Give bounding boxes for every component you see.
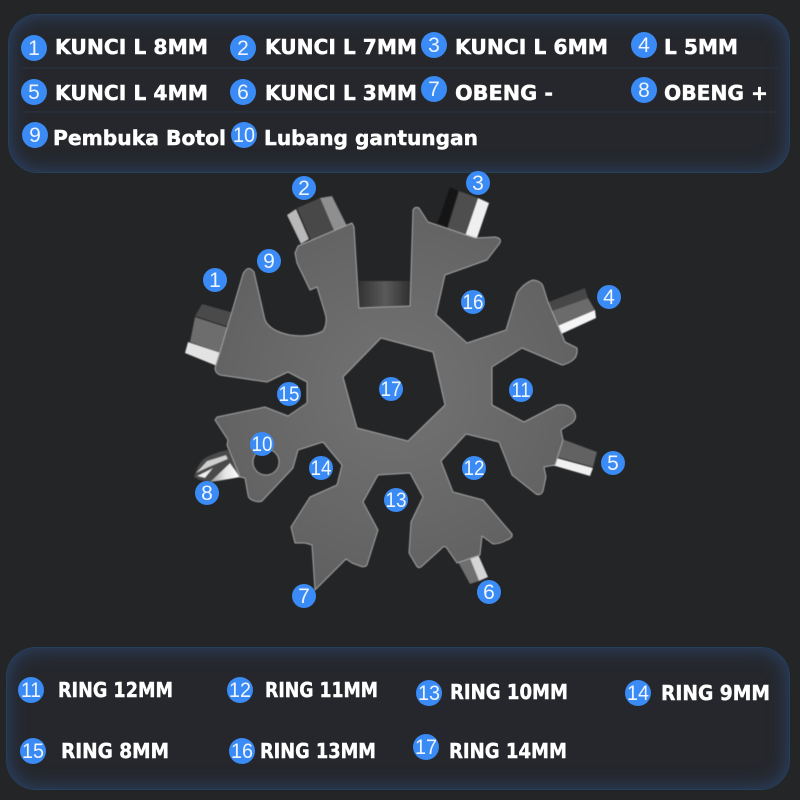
legend item 12: RING 11MM bbox=[265, 678, 378, 702]
legend item 16: RING 13MM bbox=[260, 739, 376, 763]
legend item 2: KUNCI L 7MM bbox=[265, 35, 417, 59]
callout 9 bbox=[257, 249, 281, 273]
callout 8: 8 bbox=[201, 482, 213, 505]
callout 4 bbox=[597, 285, 621, 309]
bridge cylinder bbox=[359, 281, 412, 309]
callout 9: 9 bbox=[263, 250, 275, 273]
callout 15: 15 bbox=[278, 383, 300, 406]
hex bit 1 bbox=[185, 304, 234, 366]
legend item 16 bbox=[229, 738, 376, 764]
callout 7 bbox=[292, 584, 316, 608]
legend item 4: 4 bbox=[638, 34, 650, 57]
callout 6 bbox=[477, 580, 501, 604]
tool body bbox=[215, 207, 577, 590]
legend item 14 bbox=[625, 680, 770, 706]
legend item 14: RING 9MM bbox=[661, 681, 770, 705]
hex bit 4 bbox=[546, 288, 596, 335]
legend item 15 bbox=[20, 738, 169, 764]
hex bit 3 bbox=[437, 187, 489, 241]
callout 11: 11 bbox=[512, 379, 530, 402]
callout 6: 6 bbox=[483, 581, 495, 604]
legend item 7: OBENG - bbox=[455, 81, 553, 105]
legend item 12 bbox=[227, 677, 378, 703]
callout 5: 5 bbox=[607, 452, 619, 475]
legend item 8 bbox=[631, 77, 768, 105]
legend item 4 bbox=[631, 32, 738, 59]
legend item 13: 13 bbox=[418, 682, 440, 705]
legend item 6: KUNCI L 3MM bbox=[265, 81, 417, 105]
callout 17: 17 bbox=[380, 378, 402, 401]
callout 16: 16 bbox=[462, 291, 484, 314]
legend item 11: 11 bbox=[21, 679, 41, 702]
legend item 12: 12 bbox=[229, 679, 251, 702]
legend item 10: 10 bbox=[233, 124, 255, 147]
legend item 14: 14 bbox=[627, 682, 649, 705]
legend item 3: KUNCI L 6MM bbox=[455, 35, 608, 59]
hex bit 2 bbox=[287, 196, 347, 244]
legend item 9: Pembuka Botol bbox=[53, 126, 226, 150]
callout 3 bbox=[466, 171, 490, 195]
hex bit 6 bbox=[458, 552, 488, 584]
legend item 16: 16 bbox=[231, 740, 253, 763]
legend item 15: RING 8MM bbox=[61, 739, 169, 763]
legend item 13: RING 10MM bbox=[450, 680, 568, 704]
callout 8 bbox=[195, 481, 219, 505]
legend item 9: 9 bbox=[29, 124, 41, 147]
callout 1: 1 bbox=[209, 269, 221, 292]
legend item 8: OBENG + bbox=[664, 81, 768, 105]
callout 2 bbox=[292, 176, 316, 200]
legend item 6: 6 bbox=[237, 81, 249, 104]
legend item 5: KUNCI L 4MM bbox=[55, 81, 208, 105]
legend item 8: 8 bbox=[638, 79, 650, 102]
callout 10: 10 bbox=[252, 433, 272, 456]
legend item 3: 3 bbox=[428, 34, 440, 57]
callout 14: 14 bbox=[310, 457, 332, 480]
panel: ring legend bbox=[6, 647, 790, 790]
legend item 1: 1 bbox=[28, 37, 40, 60]
legend item 1: KUNCI L 8MM bbox=[55, 35, 208, 59]
callout 12: 12 bbox=[464, 457, 484, 480]
screwdriver bit 8 bbox=[194, 450, 240, 482]
legend item 5: 5 bbox=[28, 81, 40, 104]
callout 7: 7 bbox=[298, 585, 310, 608]
callout 3: 3 bbox=[472, 172, 484, 195]
legend item 17 bbox=[413, 734, 567, 763]
legend item 7: 7 bbox=[428, 78, 440, 101]
hex bit 5 bbox=[552, 439, 597, 476]
legend item 4: L 5MM bbox=[664, 35, 738, 59]
legend item 11 bbox=[18, 677, 173, 703]
callout 4: 4 bbox=[603, 286, 615, 309]
legend item 7 bbox=[421, 76, 553, 105]
legend item 15: 15 bbox=[22, 740, 44, 763]
legend item 17: RING 14MM bbox=[449, 739, 567, 763]
legend item 11: RING 12MM bbox=[58, 678, 173, 702]
callout 1 bbox=[203, 268, 227, 292]
legend item 17: 17 bbox=[415, 736, 437, 759]
legend item 10: Lubang gantungan bbox=[264, 126, 478, 150]
callout 2: 2 bbox=[298, 177, 310, 200]
legend item 2: 2 bbox=[237, 37, 249, 60]
callout 13: 13 bbox=[386, 489, 406, 512]
legend item 13 bbox=[416, 680, 568, 706]
panel: tools legend bbox=[8, 14, 790, 173]
callout 5 bbox=[601, 451, 625, 475]
